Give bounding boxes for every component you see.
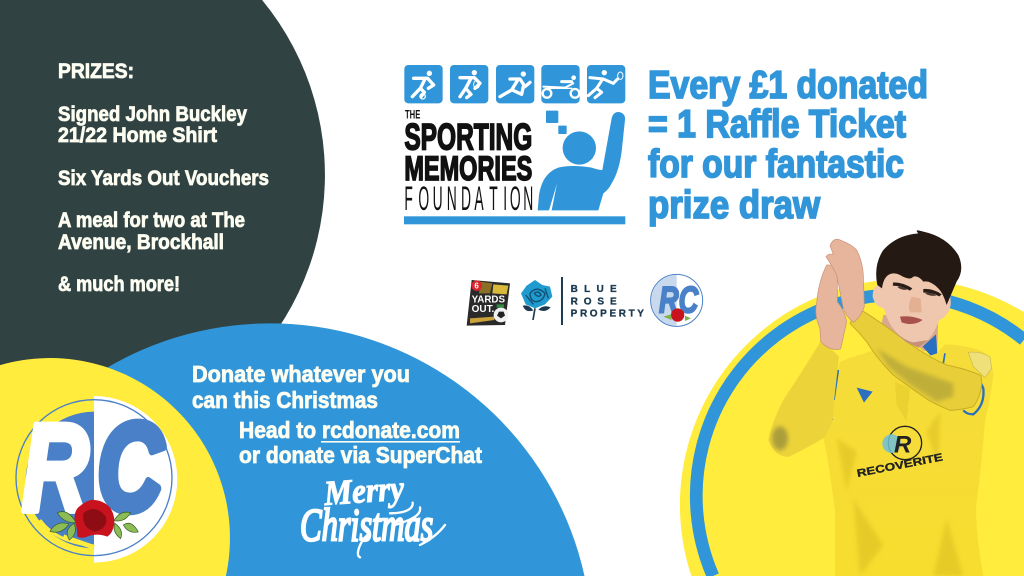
logo: RC badge — [16, 396, 177, 563]
forearm dirt — [877, 348, 953, 402]
hair — [876, 230, 961, 305]
prize: signed shirt: Signed John Buckley — [58, 102, 247, 126]
donate text block: Head to rcdonate.com — [239, 417, 460, 443]
icon: rugby — [450, 65, 488, 103]
prize: meal for two — [58, 208, 245, 254]
logo: six yards out: YARDS — [472, 294, 506, 305]
merry christmas lettering — [300, 468, 445, 557]
blue collar — [872, 334, 937, 362]
wordmark: THE — [405, 107, 420, 121]
logo: blue rose — [521, 280, 552, 320]
merry christmas lettering: Merry — [322, 468, 406, 513]
prize: vouchers: Six Yards Out Vouchers — [58, 166, 269, 190]
sponsor name: RECOVERITE — [856, 451, 944, 480]
facial features — [893, 282, 942, 324]
raffle heading: Every £1 donated — [648, 64, 928, 107]
shirt body — [823, 343, 993, 576]
prizes heading: PRIZES: — [58, 59, 134, 83]
icon: running — [496, 65, 534, 103]
macron logo — [857, 388, 873, 403]
donate text block: or donate via SuperChat — [239, 442, 482, 468]
prizes text block — [58, 59, 269, 296]
blue half disc — [26, 412, 94, 548]
white half disc — [94, 396, 177, 563]
logo: small RC badge: RC — [659, 280, 699, 321]
placket and buttons — [895, 382, 910, 422]
logo: six yards out: OUT. — [472, 304, 495, 315]
sponsor mark: R — [894, 431, 912, 458]
icon: cycling — [541, 65, 580, 103]
forearm sleeve — [850, 310, 982, 410]
wordmark: MEMORIES — [404, 150, 532, 188]
face — [873, 268, 951, 344]
rose — [75, 500, 114, 538]
prize: meal for two: A meal for two at The — [58, 208, 245, 232]
icon: tennis — [587, 65, 625, 103]
yellow brush swirls — [28, 404, 94, 552]
left arm sleeve — [768, 342, 839, 457]
wordmark: FOUNDATION — [404, 178, 533, 218]
letter C: C — [97, 399, 164, 537]
shirt shading — [837, 412, 963, 576]
logo text: blue rose property — [571, 284, 644, 319]
blue base bar — [404, 216, 625, 224]
wordmark: SPORTING — [404, 115, 532, 157]
prize: much more: & much more! — [58, 272, 180, 296]
sponsor logos row — [467, 274, 703, 326]
prize: signed shirt: 21/22 Home Shirt — [58, 123, 217, 147]
player: clapping footballer — [768, 230, 993, 576]
wordmark — [404, 107, 533, 218]
sleeve trim — [952, 368, 984, 414]
badge on sleeve — [968, 352, 992, 378]
sponsor mark — [882, 426, 922, 460]
raffle heading: for our fantastic — [648, 143, 904, 186]
logo text: blue rose property: BLUE — [571, 284, 617, 295]
icon: raised hand figure — [538, 111, 625, 210]
prize: signed shirt — [58, 102, 247, 147]
neck — [877, 315, 938, 351]
logo: six yards out — [467, 280, 510, 326]
merry christmas lettering: Christmas — [300, 500, 433, 552]
panel: donate blue circle — [0, 323, 584, 576]
raffle heading: = 1 Raffle Ticket — [648, 103, 906, 146]
icon: football — [404, 65, 443, 103]
logo text: blue rose property: PROPERTY — [571, 308, 644, 319]
prize: meal for two: Avenue, Brockhall — [58, 230, 224, 254]
yellow ring behind player — [680, 279, 1024, 576]
logo: sporting memories foundation — [404, 65, 625, 224]
rose leaves — [50, 512, 138, 540]
logo: six yards out: 6 — [474, 282, 479, 291]
sport icons row — [404, 65, 625, 103]
raffle heading — [648, 64, 928, 227]
jaw shadow — [893, 332, 928, 348]
panel: prizes dark circle — [0, 0, 325, 400]
hands — [816, 239, 864, 350]
outline ring — [16, 400, 172, 556]
letter R: R — [22, 400, 89, 538]
donate text block — [192, 361, 482, 468]
donate text block: can this Christmas — [192, 387, 378, 413]
left sleeve dirt — [772, 426, 788, 450]
logo: small RC badge — [651, 274, 703, 326]
donate text block: Donate whatever you — [192, 361, 410, 387]
panel: yellow circle with logo — [0, 358, 230, 576]
divider — [561, 277, 563, 325]
logo text: blue rose property: ROSE — [571, 296, 617, 307]
raffle heading: prize draw — [648, 184, 821, 227]
